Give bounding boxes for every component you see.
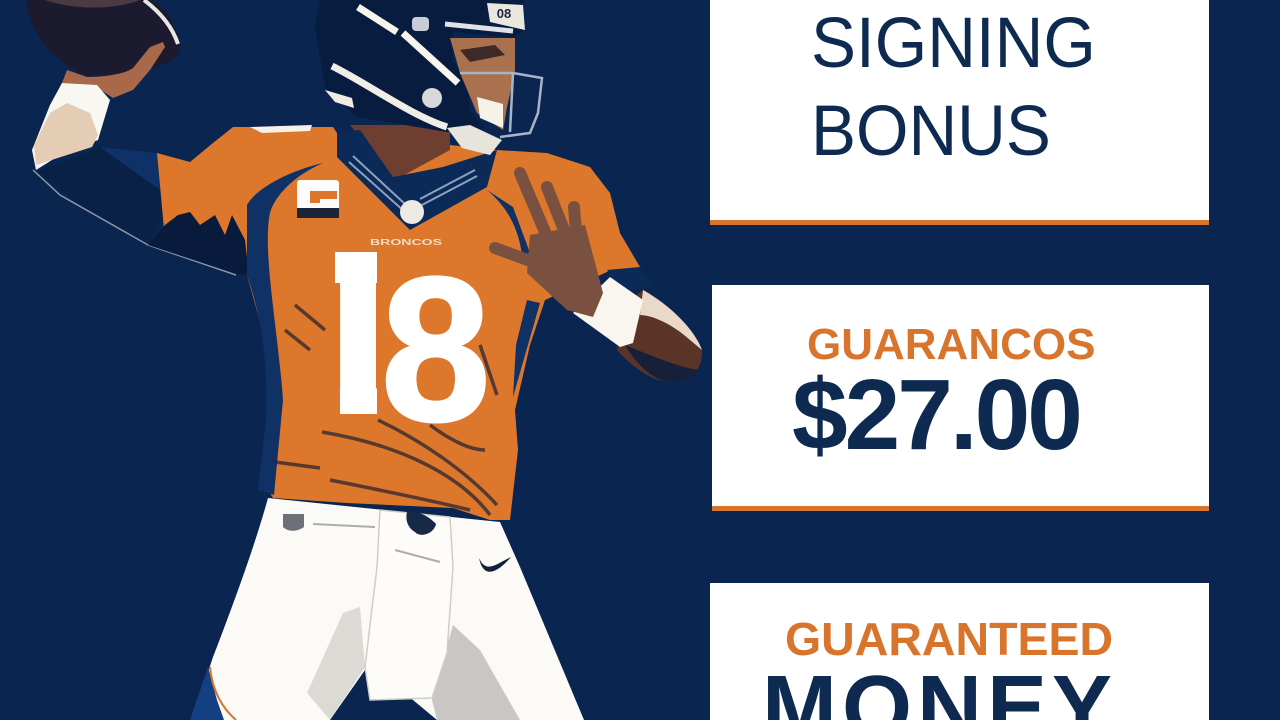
card: guaranteed money [710, 583, 1209, 720]
wrist band [573, 277, 643, 347]
helmet and face [315, 0, 542, 155]
helmet and face: 08 [497, 6, 511, 21]
shoulder patch [250, 125, 312, 133]
hand [495, 173, 577, 262]
illustration: quarterback throwing a football [27, 0, 702, 720]
chin guard [447, 125, 502, 155]
captain patch [297, 180, 339, 218]
waist logo [406, 512, 436, 535]
cuff [607, 267, 653, 292]
white pants [190, 498, 584, 720]
crotch flap [365, 510, 453, 700]
card: guarantees amount [712, 285, 1209, 511]
helmet logo [422, 88, 442, 108]
jersey wrinkles [275, 305, 497, 515]
value: amount: $27.00 [792, 359, 1080, 471]
helmet shell [315, 0, 525, 132]
leg shading [307, 607, 365, 720]
orange jersey [148, 125, 640, 520]
side patch [283, 514, 304, 531]
throwing arm: hand, wrist band and navy sleeve [32, 42, 236, 275]
collar button [400, 200, 424, 224]
right side panels [487, 190, 530, 255]
jersey wordmark: BRONCOS [370, 238, 443, 247]
forearm [617, 290, 702, 382]
helmet sticker [487, 3, 525, 30]
left side panel [247, 163, 323, 495]
card: signing bonus [710, 0, 1209, 225]
face mask [460, 73, 542, 137]
football [27, 0, 180, 76]
heading: signing bonus: BONUS [811, 92, 1051, 171]
label: guarancos: GUARANCOS [807, 320, 1095, 369]
face [450, 38, 515, 130]
knee stripe [190, 667, 224, 720]
collar [337, 130, 497, 230]
heading: signing bonus [811, 4, 1096, 171]
under-sleeve shadow [148, 212, 249, 275]
neck [350, 125, 450, 180]
label: guaranteed: GUARANTEED [785, 613, 1113, 665]
jersey number [335, 252, 486, 424]
raised hand and forearm [495, 173, 702, 382]
jersey number: 1 [288, 205, 417, 464]
heading: signing bonus: SIGNING [811, 4, 1096, 83]
jersey number: 8 [381, 234, 490, 464]
swoosh [479, 557, 511, 572]
